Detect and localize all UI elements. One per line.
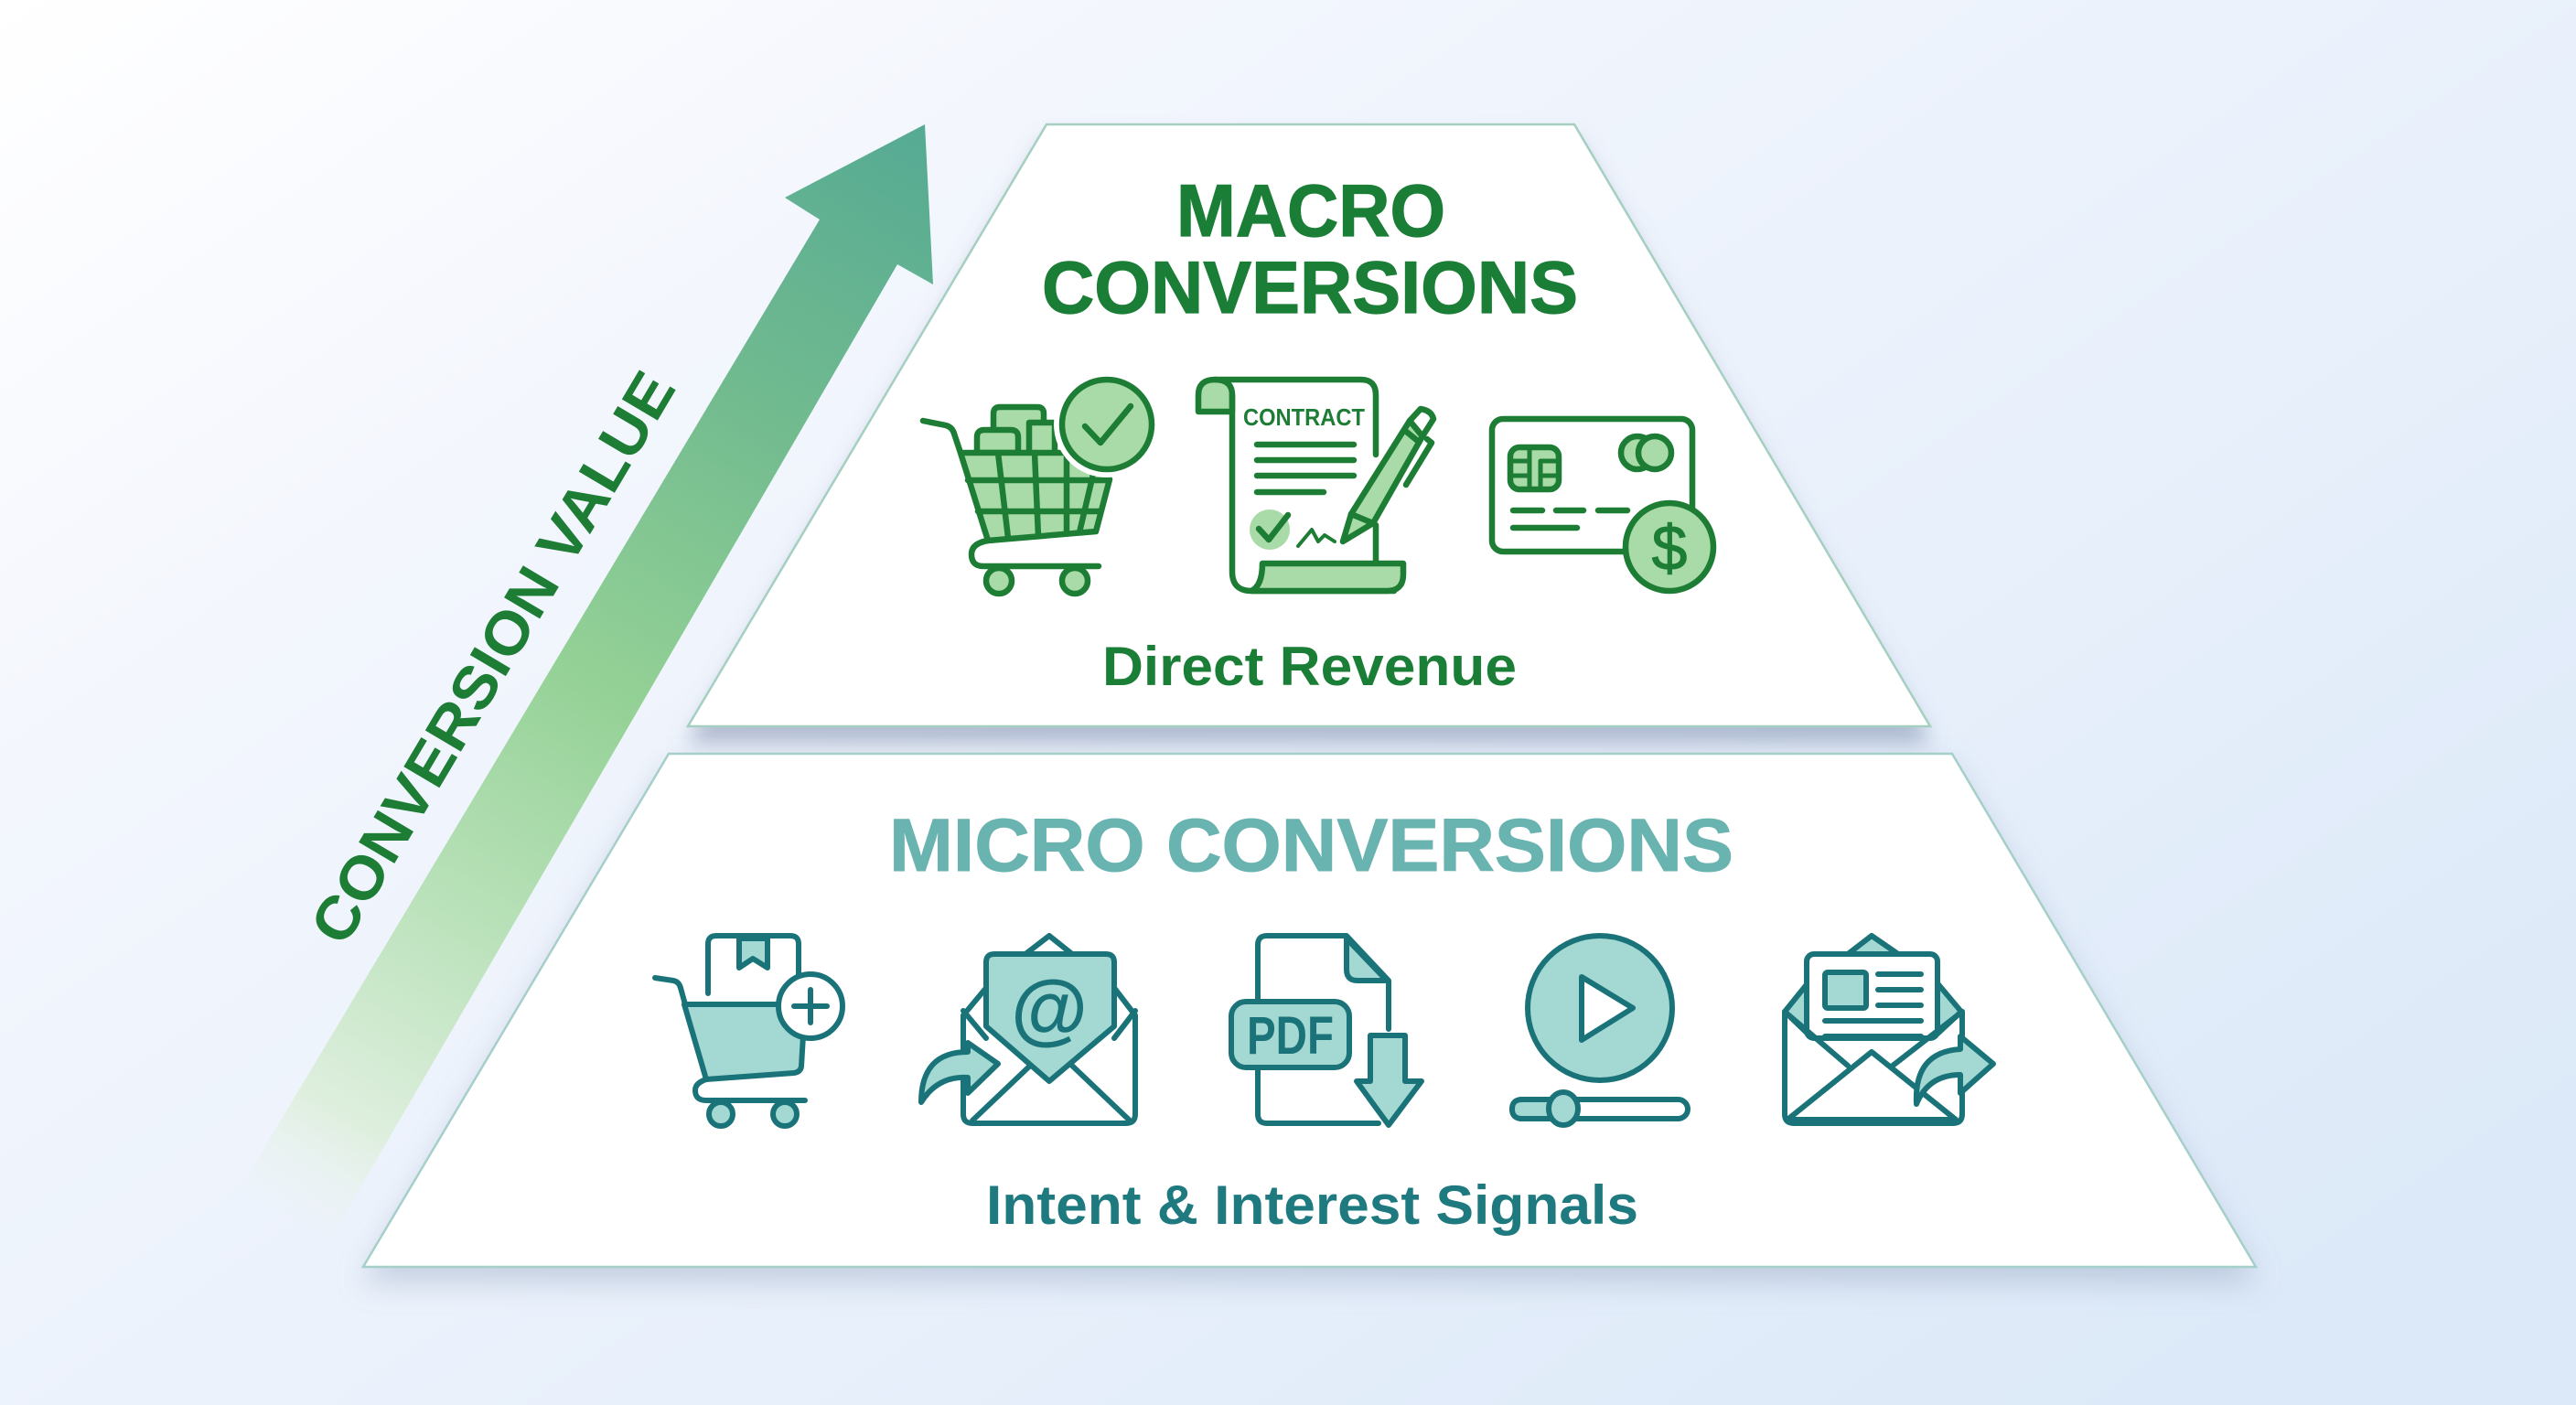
icon: shopping cart with check — [923, 371, 1160, 594]
icon: video play — [1512, 936, 1688, 1125]
panel: macro conversions — [688, 124, 1930, 726]
icon: credit card with dollar coin — [1492, 419, 1713, 591]
icon: pdf download: PDF — [1247, 1006, 1334, 1066]
micro panel shape — [363, 754, 2256, 1267]
icon: newsletter envelope — [1785, 936, 1993, 1123]
micro heading: MICRO CONVERSIONS — [889, 804, 1733, 887]
macro caption: Direct Revenue — [1102, 636, 1517, 697]
icon: cart with add — [655, 936, 843, 1126]
arrow: conversion value — [240, 124, 933, 1244]
icon: email with at sign: @ — [1011, 965, 1088, 1053]
icon: pdf download — [1231, 936, 1422, 1125]
icon: signed contract — [1198, 380, 1433, 591]
macro heading line 2: CONVERSIONS — [1042, 247, 1578, 329]
axis label: conversion value: CONVERSION VALUE — [296, 359, 688, 955]
macro panel shape — [688, 124, 1930, 726]
macro heading line 1: MACRO — [1176, 170, 1445, 252]
micro caption: Intent & Interest Signals — [986, 1174, 1638, 1236]
panel: micro conversions — [363, 754, 2256, 1267]
contract label: CONTRACT — [1243, 403, 1365, 431]
icon: credit card with dollar coin: $ — [1652, 512, 1687, 584]
icon: email with at sign — [921, 936, 1135, 1123]
